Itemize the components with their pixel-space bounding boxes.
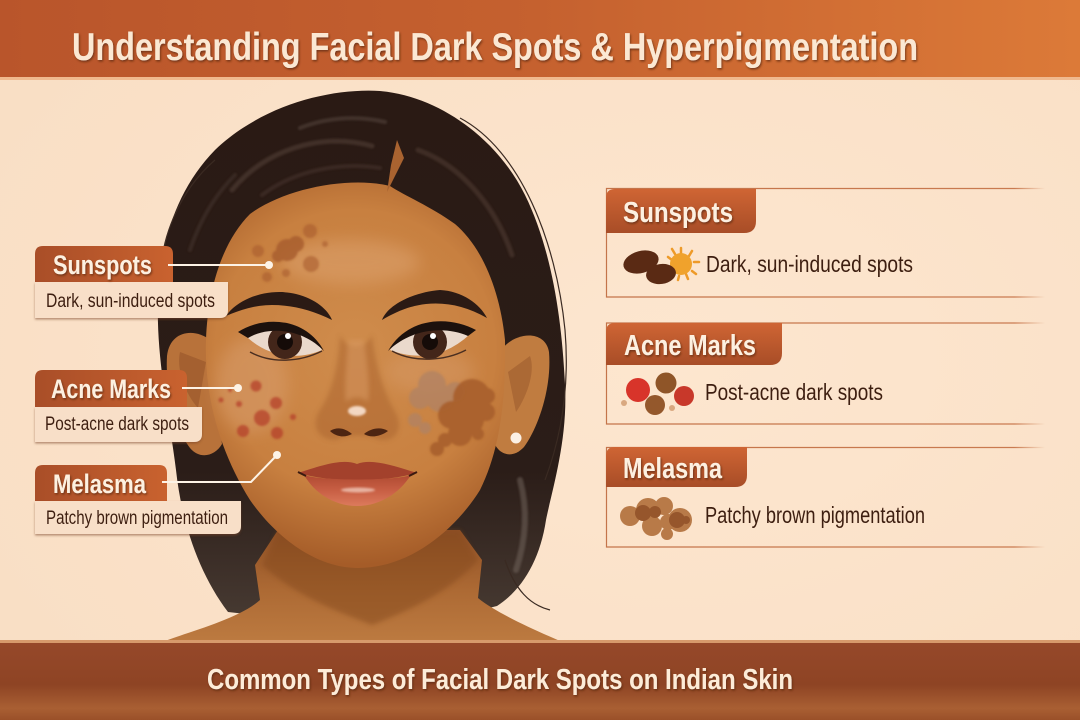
- header band: [0, 0, 1080, 80]
- leader line: [182, 387, 238, 389]
- right eye: [388, 321, 476, 359]
- panel: Acne Marks: [606, 323, 1045, 424]
- eyebrows: [226, 292, 332, 320]
- left eye: [238, 322, 324, 360]
- icon: sun and spots: [621, 247, 699, 286]
- left callout: Acne Marks: [35, 370, 242, 442]
- panel: Sunspots: [606, 188, 1045, 297]
- neck shadow: [262, 530, 478, 625]
- leader line: [168, 264, 269, 266]
- nose: [316, 335, 399, 440]
- description box: [35, 407, 202, 442]
- footer band: [0, 640, 1080, 720]
- tag: [35, 465, 167, 501]
- panel description: Post-acne dark spots: [705, 379, 883, 405]
- hair back: [158, 91, 565, 620]
- tag: [35, 370, 187, 407]
- cheek highlights: [216, 337, 288, 433]
- description box: [35, 282, 228, 318]
- tag: [35, 246, 173, 282]
- right ear: [494, 335, 549, 454]
- hair highlights: [190, 118, 525, 570]
- icon: melasma patch: [620, 497, 692, 540]
- tag text: Acne Marks: [51, 374, 171, 404]
- description text: Dark, sun-induced spots: [46, 291, 215, 312]
- lips: [298, 462, 417, 506]
- earring: [510, 432, 522, 444]
- hair parting: [387, 140, 404, 192]
- title: Understanding Facial Dark Spots & Hyperpigmentation: [72, 26, 918, 69]
- hair wisps: [160, 118, 566, 610]
- panel description: Patchy brown pigmentation: [705, 502, 925, 528]
- leader line: [162, 455, 277, 482]
- tag text: Sunspots: [53, 250, 152, 280]
- description box: [35, 501, 241, 534]
- panel frame: [606, 323, 1045, 424]
- neck and shoulders: [165, 530, 560, 641]
- forehead highlight: [280, 240, 420, 284]
- panel frame: [606, 448, 1045, 547]
- left callout: Melasma: [35, 451, 281, 534]
- description text: Patchy brown pigmentation: [46, 508, 228, 529]
- left ear: [167, 333, 222, 455]
- panel: Melasma: [606, 447, 1045, 547]
- panel heading: Melasma: [623, 453, 723, 485]
- panel heading: Acne Marks: [624, 330, 756, 362]
- panel tag: [606, 189, 756, 233]
- left callout: Sunspots: [35, 246, 273, 318]
- tag text: Melasma: [53, 469, 147, 499]
- facial melasma patch: [408, 371, 495, 456]
- panel heading: Sunspots: [623, 197, 733, 229]
- icon: acne spots: [621, 372, 694, 415]
- panel tag: [606, 323, 782, 365]
- panel description: Dark, sun-induced spots: [706, 251, 913, 277]
- panel frame: [606, 188, 1045, 297]
- facial sunspots: [252, 224, 328, 282]
- description text: Post-acne dark spots: [45, 414, 189, 435]
- panel tag: [606, 447, 747, 487]
- facial acne marks: [218, 380, 296, 439]
- illustration: woman's face: [158, 91, 566, 641]
- footer caption: Common Types of Facial Dark Spots on Indian Skin: [207, 664, 793, 696]
- face: [206, 182, 505, 568]
